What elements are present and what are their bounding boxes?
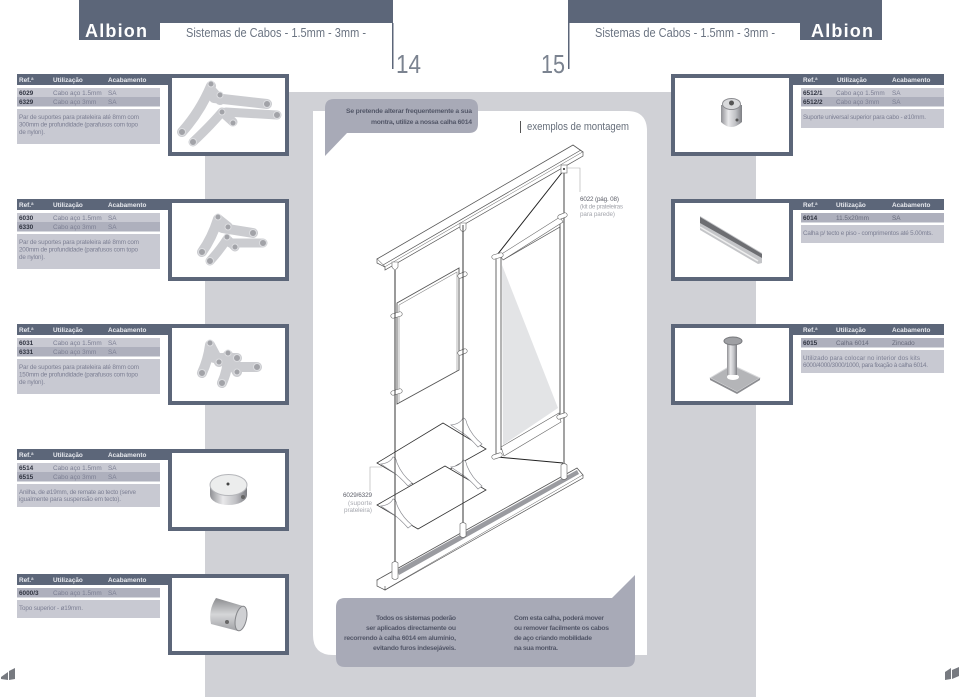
table rows: SA (108, 99, 117, 106)
table row: SA (108, 590, 117, 597)
table rows: Cabo aço 3mm (53, 99, 96, 106)
description: Topo superior - ø19mm. (19, 605, 83, 612)
table rows (17, 88, 160, 106)
table header: Utilização (53, 452, 83, 459)
table header: Utilização (836, 327, 866, 334)
callout: bottom notes: Todos os sistemas poderão (376, 615, 456, 622)
table row: Zincado (892, 340, 915, 347)
description (17, 600, 160, 618)
table rows: Cabo aço 1.5mm (53, 215, 102, 222)
central white panel (313, 111, 647, 655)
product photo: brackets (170, 76, 287, 154)
table rows (17, 213, 160, 232)
icon: footer mark right (945, 667, 959, 680)
table row: 6015 (803, 340, 818, 347)
product photo: brackets (170, 326, 287, 403)
table row: Calha 6014 (836, 340, 869, 347)
table row: 6014 (803, 215, 818, 222)
table header: Utilização (53, 77, 83, 84)
page number 15: 15 (541, 49, 565, 79)
table rows: Cabo aço 3mm (53, 224, 96, 231)
banner (494, 215, 565, 457)
table header: Ref.ª (19, 452, 34, 459)
description: de nylon). (19, 254, 45, 261)
brand name right: Albion (811, 21, 873, 41)
table header: Ref.ª (803, 77, 818, 84)
table header: Acabamento (108, 202, 146, 209)
table header: Utilização (53, 577, 83, 584)
table rows: SA (892, 99, 901, 106)
section heading: exemplos de montagem: exemplos de montagem (527, 121, 629, 133)
table rows: SA (108, 90, 117, 97)
brand name left: Albion (85, 21, 147, 41)
table header: Ref.ª (19, 77, 34, 84)
table row: Cabo aço 1.5mm (53, 590, 102, 597)
table rows: SA (108, 215, 117, 222)
table header (17, 199, 168, 210)
description: 300mm de profundidade (parafusos com topo (19, 122, 138, 128)
table header: Utilização (837, 77, 867, 84)
product photo: end stop (170, 576, 287, 653)
poster (393, 268, 465, 404)
table rows: Cabo aço 3mm (53, 474, 96, 481)
table rows: SA (108, 340, 117, 347)
label: 6022: (kit de prateleiras (580, 204, 623, 210)
product 6030/6330 (17, 199, 287, 279)
table header: Utilização (836, 202, 866, 209)
table header: Ref.ª (19, 577, 34, 584)
label: 6022 (566, 168, 623, 218)
table header (17, 449, 168, 460)
mounting illustration (343, 145, 623, 590)
table header: Acabamento (108, 77, 146, 84)
table header: Acabamento (892, 77, 930, 84)
description (17, 484, 160, 507)
right page header (568, 0, 882, 69)
description: de nylon). (19, 129, 45, 136)
table rows: 6330 (19, 224, 34, 231)
shelves (377, 225, 486, 562)
table header: Acabamento (108, 577, 146, 584)
product photo: ring cap (170, 451, 287, 529)
table rows (17, 338, 160, 356)
table row (17, 588, 160, 598)
callout: bottom notes: ser aplicados directamente ou (366, 625, 456, 632)
table header: Ref.ª (19, 327, 34, 334)
table rows: 6514 (19, 465, 34, 472)
table rows: Cabo aço 3mm (836, 99, 879, 106)
description: Par de suportes para prateleira até 8mm com (19, 364, 139, 371)
table row: 6000/3 (19, 590, 39, 597)
table rows: SA (108, 474, 117, 481)
description: Par de suportes para prateleira até 8mm com (19, 239, 139, 246)
table rows: SA (108, 465, 117, 472)
description (801, 350, 944, 373)
description (17, 359, 160, 394)
cables (395, 170, 564, 562)
description (801, 225, 944, 243)
table header: Acabamento (892, 202, 930, 209)
table header (793, 324, 944, 335)
left page header (79, 0, 394, 69)
grey background band (205, 92, 756, 697)
label: 6029/6329 (343, 467, 382, 514)
description: 200mm de profundidade (parafusos com topo (19, 246, 138, 254)
table rows: 6029 (19, 90, 34, 97)
callout: calha 6014 (325, 99, 478, 156)
table rows (17, 463, 160, 482)
table rows (801, 88, 944, 106)
callout: calha 6014: Se pretende alterar frequentemente a sua (346, 108, 472, 115)
description: Par de suportes para prateleira até 8mm com (19, 114, 139, 121)
table header (17, 74, 168, 85)
table row (801, 338, 944, 348)
product 6000/3 (17, 574, 287, 653)
label: 6022: para parede) (580, 211, 615, 218)
label: 6022: 6022 (pág. 08) (580, 196, 619, 203)
description: Utilizado para colocar no interior dos kits (803, 355, 920, 362)
callout: bottom notes: recorrendo à calha 6014 em alumínio, (344, 635, 456, 642)
callout: bottom notes: de aço criando mobilidade (514, 635, 592, 642)
callout: bottom notes: ou remover facilmente os cabos (514, 625, 609, 632)
description: Calha p/ tecto e piso - comprimentos até 5.00mts. (803, 230, 933, 237)
table rows: 6329 (19, 99, 34, 106)
callout: bottom notes: evitando furos indesejáveis. (373, 645, 456, 652)
product 6512/1 and 6512/2 (673, 74, 944, 154)
icon: footer mark left (1, 668, 15, 680)
right page title: Sistemas de Cabos - 1.5mm - 3mm - (595, 26, 775, 40)
description: Anilha, de ø19mm, de remate ao tecto (serve (19, 489, 136, 496)
callout: bottom notes (336, 575, 635, 667)
wall fixings (392, 165, 567, 270)
table row: SA (892, 215, 901, 222)
label: 6029/6329: 6029/6329 (343, 492, 372, 499)
table header (17, 324, 168, 335)
label: 6029/6329: prateleira) (344, 507, 372, 514)
table rows: Cabo aço 1.5mm (53, 465, 102, 472)
table header: Ref.ª (803, 327, 818, 334)
table rows: SA (108, 224, 117, 231)
table header: Utilização (53, 327, 83, 334)
description: Suporte universal superior para cabo - ø10mm. (803, 114, 926, 121)
table rows: Cabo aço 3mm (53, 349, 96, 356)
page number 14: 14 (396, 49, 421, 79)
table rows: 6515 (19, 474, 34, 481)
table header: Acabamento (108, 452, 146, 459)
table header (793, 199, 944, 210)
product photo: stud plate (673, 326, 791, 403)
table rows: 6512/2 (803, 99, 823, 106)
table rows: SA (108, 349, 117, 356)
table header (793, 74, 944, 85)
table header: Acabamento (892, 327, 930, 334)
table rows: Cabo aço 1.5mm (836, 90, 885, 97)
description: igualmente para suspensão em tecto). (19, 496, 121, 503)
table rows: Cabo aço 1.5mm (53, 90, 102, 97)
callout: calha 6014: montra, utilize a nossa calha 6014 (371, 119, 472, 126)
left page title: Sistemas de Cabos - 1.5mm - 3mm - (186, 26, 366, 40)
description (801, 109, 944, 128)
table header: Ref.ª (19, 202, 34, 209)
description: 6000/4000/3000/1000, para fixação à calha 6014. (803, 362, 928, 369)
description (17, 234, 160, 269)
label: 6029/6329: (suporte (348, 500, 372, 507)
callout: bottom notes: Com esta calha, poderá mover (514, 615, 604, 622)
callout: bottom notes: na sua montra. (514, 645, 558, 652)
table rows: 6031 (19, 340, 34, 347)
table rows: SA (892, 90, 901, 97)
table header: Acabamento (108, 327, 146, 334)
table header (17, 574, 168, 585)
description: 150mm de profundidade (parafusos com topo (19, 372, 138, 378)
product photo: universal support (673, 76, 791, 154)
table rows: 6030 (19, 215, 34, 222)
floor rail (377, 464, 583, 590)
table row (801, 213, 944, 222)
product 6029/6329 (17, 74, 287, 154)
table row: 11.5x20mm (836, 215, 869, 222)
product photo: brackets (170, 201, 287, 279)
table header: Utilização (53, 202, 83, 209)
table rows: 6512/1 (803, 90, 823, 97)
table rows: Cabo aço 1.5mm (53, 340, 102, 347)
table rows: 6331 (19, 349, 34, 356)
description (17, 109, 160, 144)
product photo: rail (673, 201, 791, 279)
product 6514/6515 (17, 449, 287, 529)
table header: Ref.ª (803, 202, 818, 209)
product 6015 (673, 324, 944, 403)
product 6014 (673, 199, 944, 279)
product 6031/6331 (17, 324, 287, 403)
description: de nylon). (19, 379, 45, 386)
top rail (377, 145, 583, 270)
